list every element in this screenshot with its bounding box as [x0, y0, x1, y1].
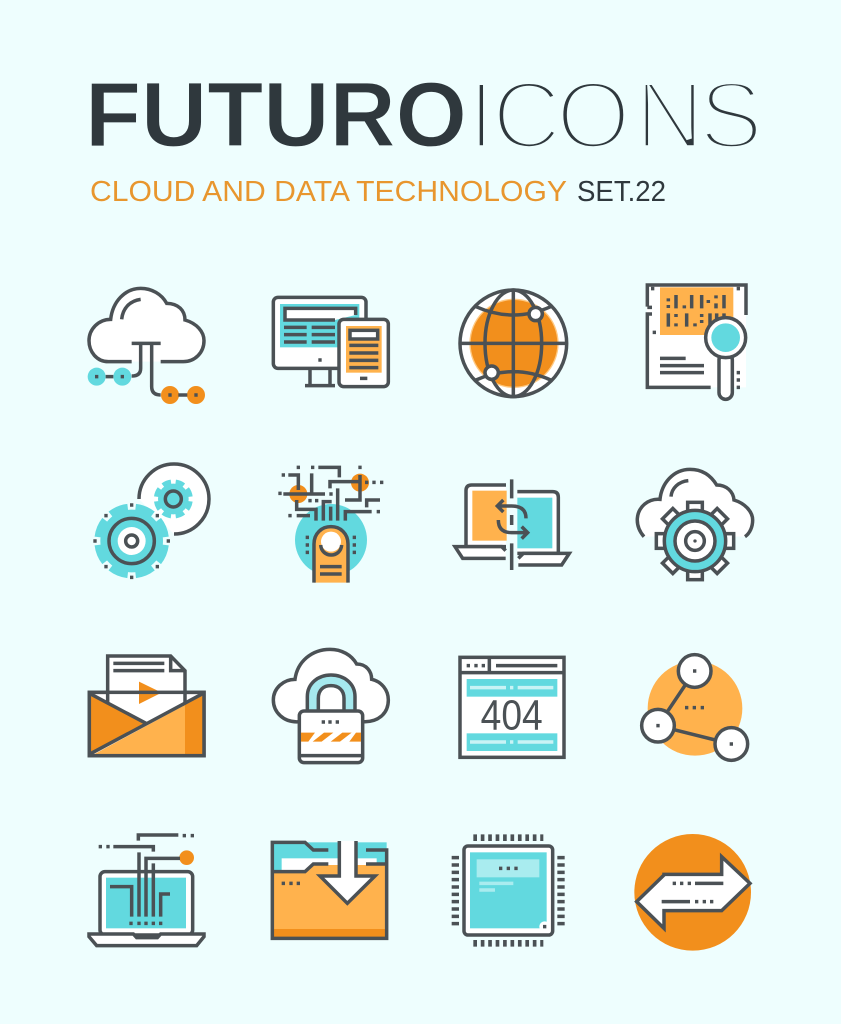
icon: laptop circuit — [89, 835, 204, 946]
title: FUTURO: FUTURO — [85, 64, 467, 166]
set number: SET.22 — [577, 176, 666, 208]
icon: barcode document search — [647, 285, 746, 399]
icon: folder download — [272, 841, 387, 938]
icon: finger touch circuit — [278, 467, 383, 583]
icon: share network — [642, 655, 748, 760]
title block — [85, 62, 763, 208]
error code 404: 404 — [481, 691, 543, 739]
icon: 404 error page — [460, 657, 564, 757]
subtitle: CLOUD AND DATA TECHNOLOGY — [90, 176, 567, 208]
icon: laptop sync — [455, 479, 569, 570]
icon: envelope with video — [89, 656, 204, 756]
icon: globe — [460, 290, 567, 397]
icon: data exchange arrows — [634, 834, 751, 951]
icon: monitor and tablet — [273, 297, 388, 387]
title: ICONS: ICONS — [468, 62, 763, 169]
icon: cloud network — [88, 288, 205, 404]
icon: cloud gear — [637, 469, 753, 580]
icon: gears — [93, 464, 209, 577]
icon: microchip — [452, 838, 565, 943]
icon: cloud padlock — [273, 649, 388, 763]
